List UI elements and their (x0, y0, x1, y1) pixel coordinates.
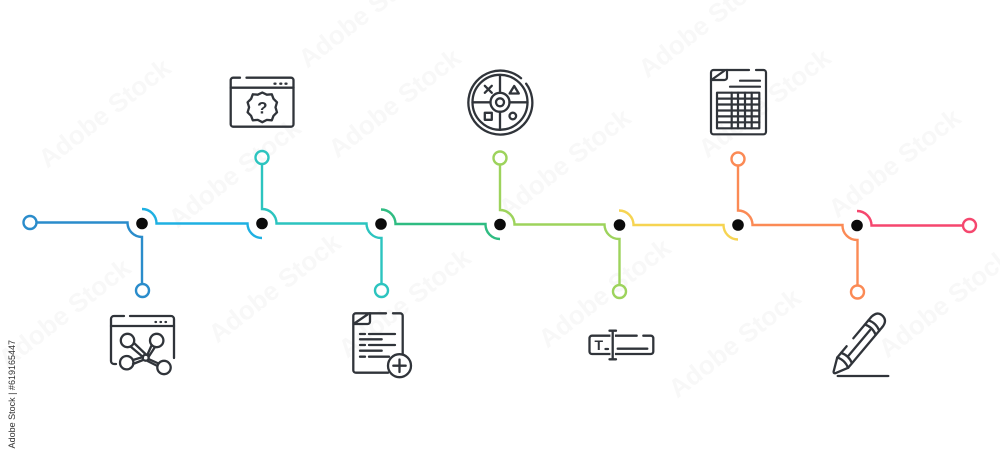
watermark pattern: Adobe Stock (823, 102, 967, 224)
watermark pattern: Adobe Stock (533, 232, 677, 354)
watermark pattern: Adobe Stock (333, 242, 477, 364)
segment: green, node 3 to node 4 (381, 210, 500, 239)
letter T: T (595, 337, 604, 353)
icon: text input field with cursor (590, 331, 653, 359)
timeline connectors (24, 151, 976, 298)
watermark pattern: Adobe Stock (163, 112, 307, 234)
stock image id: Adobe Stock | #619165447 (7, 340, 17, 448)
segment: orange, top pin to node 6 to node 7 to bottom pin (732, 152, 864, 298)
watermark pattern: Adobe Stock (663, 282, 807, 404)
segment: lime, top pin to node 4 to node 5 to bottom pin (494, 152, 626, 298)
segment: sky blue, node 1 to node 2 (142, 209, 262, 238)
watermark pattern: Adobe Stock (493, 102, 637, 224)
icon: browser window with network nodes (111, 316, 174, 374)
watermark pattern: Adobe Stock (203, 227, 347, 349)
timeline nodes (136, 218, 863, 231)
question mark: ? (257, 98, 267, 118)
segment: teal, top pin to node 2 to node 3 to bottom pin (256, 151, 388, 297)
icon: game controller wheel (464, 66, 536, 139)
icon: document with table (711, 70, 766, 134)
icon: pencil (828, 311, 888, 378)
segment: blue, start to node 1 to bottom pin (24, 216, 149, 297)
watermark pattern: Adobe Stock (693, 42, 837, 164)
icon: browser window with question badge (231, 78, 294, 127)
segment: pink, node 7 to end (857, 211, 976, 232)
watermark pattern: Adobe Stock (323, 42, 467, 164)
segment: yellow, node 5 to node 6 (619, 210, 738, 240)
watermark pattern: Adobe Stock (33, 52, 177, 174)
icon: document with plus (353, 313, 411, 377)
